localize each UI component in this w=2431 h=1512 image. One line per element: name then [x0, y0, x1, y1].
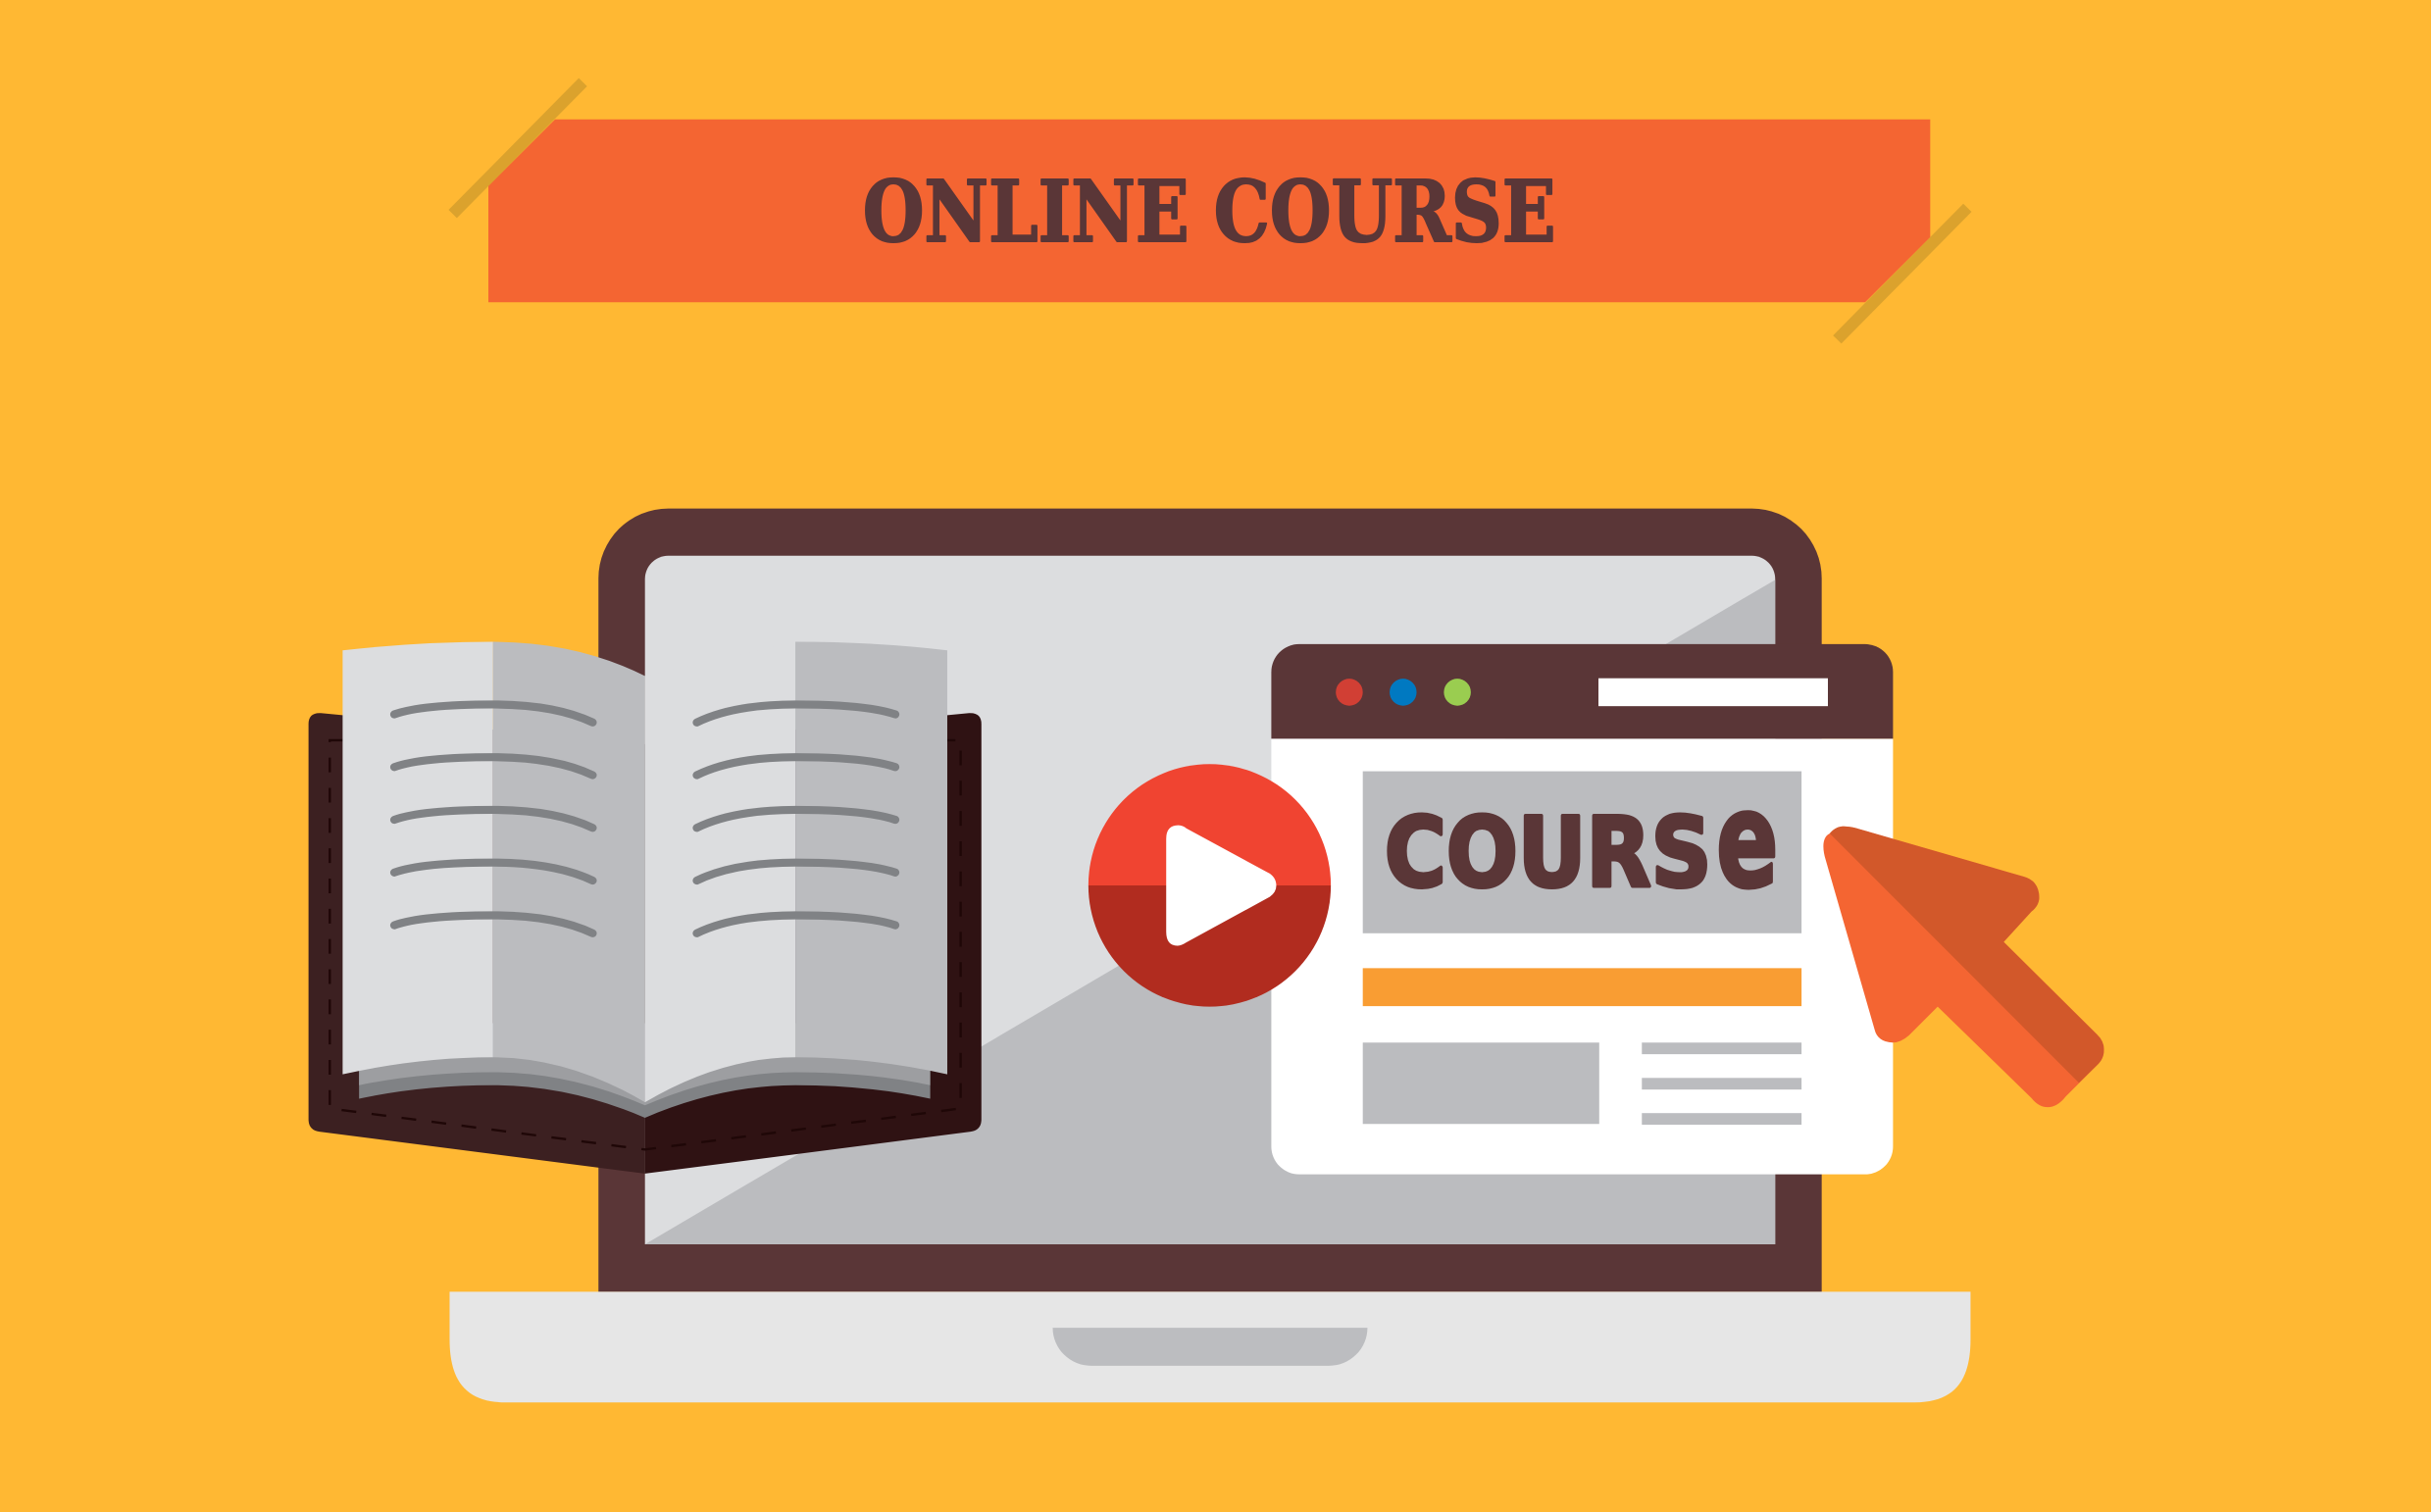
course label: COURS [1385, 798, 1711, 910]
cover stitching [329, 740, 961, 1149]
address bar [1598, 679, 1828, 706]
left page text lines [394, 704, 592, 933]
text placeholder lines [1642, 1042, 1801, 1125]
icon: play button [1089, 764, 1331, 1007]
green dot [1443, 679, 1471, 706]
book cover right [645, 713, 982, 1174]
under pages top [359, 1023, 931, 1105]
laptop frame [598, 509, 1822, 1291]
image placeholder [1363, 1042, 1599, 1124]
title: ONLINE COURSE [863, 163, 1556, 262]
course label: e [1716, 764, 1778, 918]
banner ribbon [488, 120, 1930, 302]
play circle bottom [1089, 885, 1331, 1007]
right page text lines [696, 704, 895, 933]
play circle top [1089, 764, 1331, 885]
panel: laptop [449, 509, 1970, 1402]
panel: title banner [453, 82, 1967, 339]
panel: open book [309, 642, 982, 1174]
right page shaded half [795, 642, 947, 1075]
left page light half [342, 642, 493, 1075]
icon: cursor arrow [1823, 827, 2103, 1107]
left page shaded half [493, 642, 645, 1102]
tape: top left [453, 82, 582, 214]
laptop screen [645, 556, 1775, 1244]
play triangle [1166, 826, 1276, 945]
cursor light side [1823, 827, 2103, 1107]
blue dot [1390, 679, 1417, 706]
red dot [1336, 679, 1363, 706]
window header [1271, 644, 1893, 738]
tape: bottom right [1837, 208, 1967, 339]
screen diagonal shade [645, 580, 1775, 1244]
laptop base [449, 1291, 1970, 1402]
book cover left [309, 713, 645, 1174]
trackpad notch [1052, 1328, 1367, 1366]
under pages [359, 1023, 931, 1118]
orange bar [1363, 968, 1801, 1006]
right page light half [645, 642, 795, 1102]
course banner box [1363, 772, 1801, 933]
panel: browser window [1271, 644, 1893, 1175]
window body [1271, 738, 1893, 1175]
cursor dark side [1830, 827, 2103, 1083]
